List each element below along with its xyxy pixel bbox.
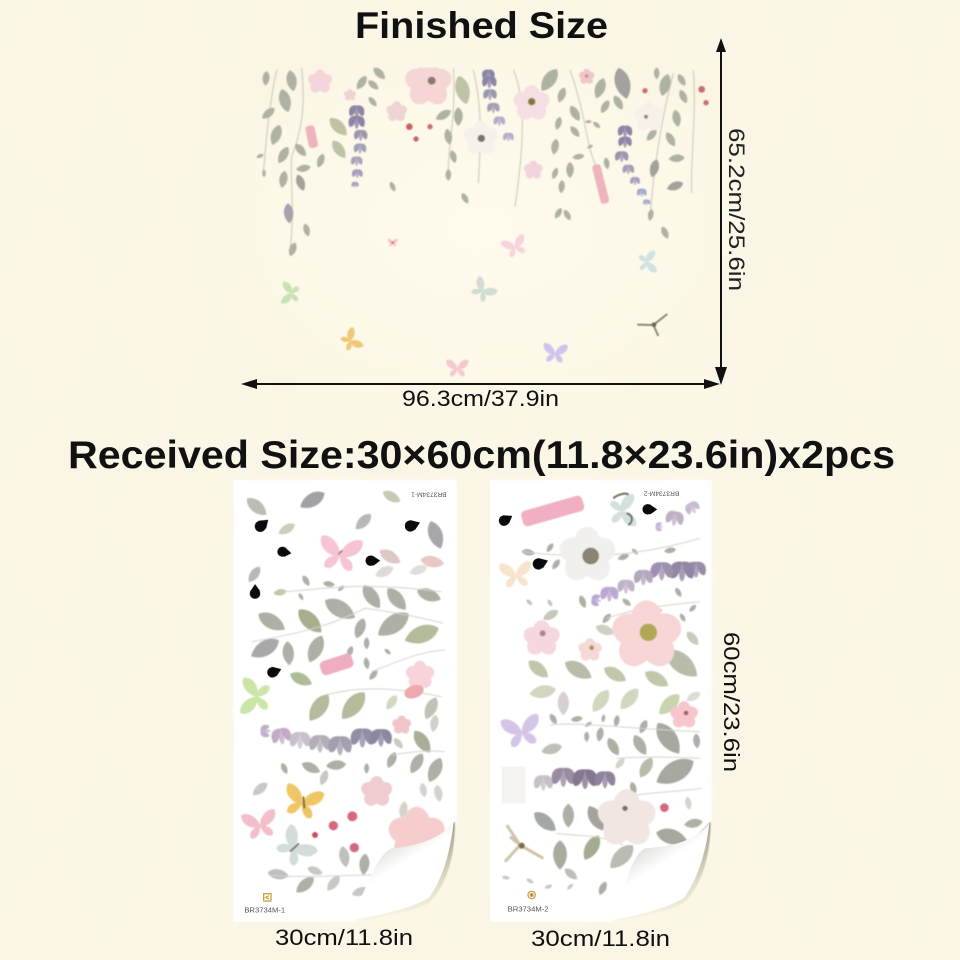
sheet 2 lavender sprigs [534, 499, 706, 791]
label: mural height: 65.2cm/25.6in [724, 128, 749, 291]
panel: sticker sheet 2 [490, 480, 713, 923]
sheet 1 black markers [250, 515, 422, 679]
panel: sticker sheet 1 [233, 480, 458, 923]
sheet 1 paper [233, 480, 457, 922]
mural stems [263, 68, 694, 250]
label: mural width: 96.3cm/37.9in [402, 386, 559, 411]
sheet 1 peeled corner [351, 815, 458, 923]
label: sheet height: 60cm/23.6in [719, 632, 744, 772]
heading: received size: Received Size:30×60cm(11.8×23.6in)x2pcs [68, 434, 895, 477]
arrow: height dimension [715, 38, 727, 385]
sheet 2 speckles [502, 767, 526, 803]
sheet 2 code top: BR3734M-2 [644, 490, 679, 497]
sheet 2 stems [523, 538, 702, 845]
sheet 1 code bottom: BR3734M-1 [244, 905, 285, 914]
hanging flowers [306, 60, 709, 180]
sheet 1 flowers [312, 652, 448, 866]
sheet 2 paper [490, 480, 712, 922]
sheet 2 butterflies and dragonfly [499, 494, 637, 862]
sheet 2 black markers [497, 504, 657, 571]
label: sheet 2 width: 30cm/11.8in [531, 926, 670, 951]
sheet 1 butterflies [240, 535, 363, 871]
sheet 2 logo [528, 891, 535, 899]
hanging leaves [256, 65, 690, 257]
pink spikes [305, 125, 610, 204]
sheet 2 peeled corner [607, 815, 713, 923]
sheet 1 stems [252, 586, 445, 876]
sheet 2 leaves [502, 542, 703, 896]
panel: finished wall mural [256, 60, 709, 376]
wisteria clusters [349, 69, 650, 205]
sheet 1 lavender sprig [260, 725, 392, 755]
sheet 1 logo [264, 894, 271, 901]
sheet 2 code bottom: BR3734M-2 [508, 905, 549, 914]
arrow: width dimension [241, 379, 720, 389]
sheet 1 leaves [243, 487, 447, 898]
label: sheet 1 width: 30cm/11.8in [275, 925, 413, 950]
title: Finished Size: Finished Size [355, 5, 608, 46]
sheet 2 flowers [520, 495, 699, 850]
falling butterflies and dragonfly [281, 234, 667, 376]
sheet 1 code top: BR3734M-1 [411, 490, 447, 497]
